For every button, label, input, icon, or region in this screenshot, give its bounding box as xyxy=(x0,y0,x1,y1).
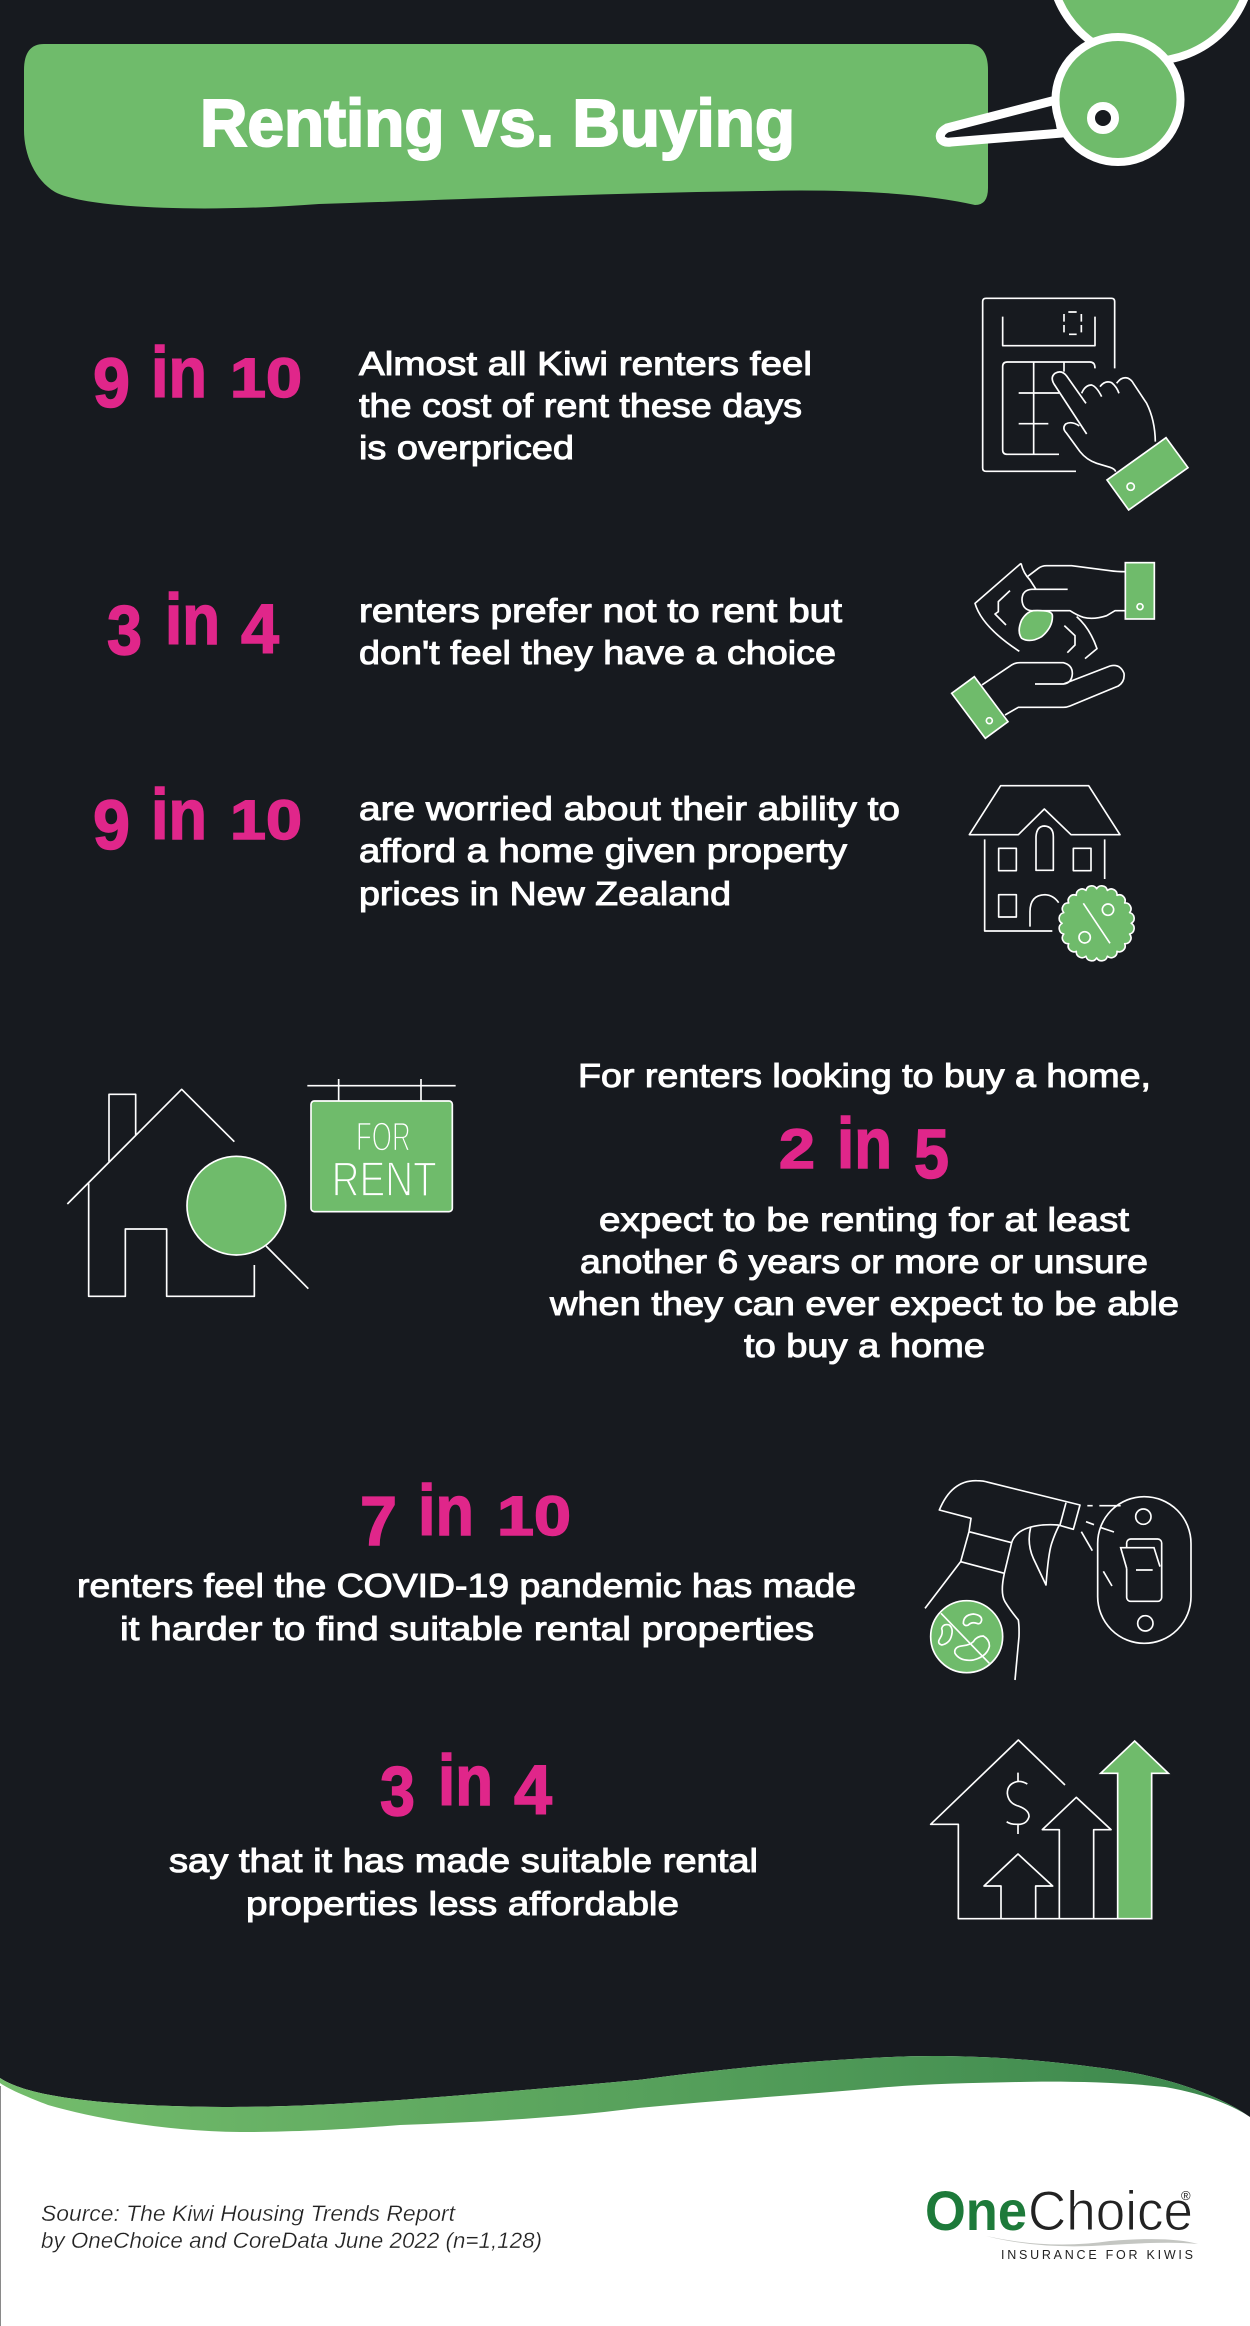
text: worried about affording a home: prices in New Zealand xyxy=(359,875,731,912)
stat: 7 in 10 xyxy=(77,1472,856,1647)
text: renters feel rent overpriced: is overpriced xyxy=(359,429,574,466)
text: covid rental search xyxy=(77,1567,856,1647)
icon: key xyxy=(940,0,1250,162)
number: 7 in 10 xyxy=(360,1472,571,1560)
number: 7 in 10: in xyxy=(418,1472,474,1551)
number: 3 in 4: 4 xyxy=(241,590,279,668)
icon: house under magnifier xyxy=(67,1089,308,1296)
text: expect to keep renting: when they can ever expect to be able xyxy=(549,1285,1179,1322)
text: less affordable xyxy=(169,1842,758,1922)
text: renters feel rent overpriced xyxy=(359,345,812,466)
stat: 9 in 10 worried xyxy=(93,776,900,912)
icon: hand on calculator xyxy=(983,298,1188,510)
OneChoice logo: One xyxy=(925,2179,1027,2242)
number: 9 in 10 xyxy=(93,776,302,864)
text: worried about affording a home xyxy=(359,790,900,912)
stat: 2 in 5 xyxy=(549,1057,1179,1364)
source note xyxy=(41,2201,542,2253)
number: 3 in 4: 4 xyxy=(514,1751,552,1829)
OneChoice logo xyxy=(925,2179,1198,2262)
number: 2 in 5: 5 xyxy=(914,1115,949,1193)
number: 3 in 4: 3 xyxy=(380,1752,415,1830)
source note: by OneChoice and CoreData June 2022 (n=1,128) xyxy=(41,2228,542,2253)
icon: spray bottle and light switch xyxy=(925,1481,1191,1680)
text: worried about affording a home: are worried about their ability to xyxy=(359,790,900,827)
icon: house with percent badge xyxy=(969,786,1134,961)
number: 3 in 4: in xyxy=(165,581,220,660)
icon: for rent sign: FOR xyxy=(356,1114,411,1160)
text: prefer not to rent xyxy=(359,592,842,671)
stat: 3 in 4 no choice xyxy=(107,581,842,671)
number: 7 in 10: 10 xyxy=(497,1484,571,1547)
icon: for rent sign xyxy=(307,1079,456,1212)
number: 2 in 5 xyxy=(779,1105,949,1193)
number: 9 in 10: in xyxy=(151,334,207,413)
number: 9 in 10: 9 xyxy=(93,344,130,422)
number: 2 in 5: in xyxy=(837,1105,892,1184)
footer white area xyxy=(0,2056,1250,2326)
text: expect to keep renting: to buy a home xyxy=(744,1327,985,1364)
OneChoice logo: INSURANCE FOR KIWIS xyxy=(1001,2248,1193,2262)
number: 3 in 4 xyxy=(380,1742,552,1830)
text: expect to keep renting: another 6 years or more or unsure xyxy=(580,1243,1148,1280)
icon: hands exchanging money xyxy=(952,563,1154,738)
text: worried about affording a home: afford a home given property xyxy=(359,832,848,869)
text: covid rental search: renters feel the COVID-19 pandemic has made xyxy=(77,1567,856,1604)
icon: for rent sign: RENT xyxy=(332,1153,437,1207)
number: 9 in 10: 9 xyxy=(93,786,130,864)
footer left edge line xyxy=(0,2086,1,2326)
OneChoice logo: Choice xyxy=(1028,2179,1193,2242)
source note: Source: The Kiwi Housing Trends Report xyxy=(41,2201,456,2226)
OneChoice logo: ® xyxy=(1181,2188,1191,2203)
text: expect to keep renting xyxy=(549,1201,1179,1364)
number: 2 in 5: 2 xyxy=(779,1117,815,1180)
text: prefer not to rent: don't feel they have a choice xyxy=(359,634,836,671)
number: 9 in 10: in xyxy=(151,776,207,855)
stat: 3 in 4 less affordable xyxy=(169,1742,758,1922)
number: 3 in 4: 3 xyxy=(107,591,142,669)
title: Renting vs. Buying xyxy=(200,86,795,161)
text: renters feel rent overpriced: Almost all Kiwi renters feel xyxy=(359,345,812,382)
lead-in text: For renters looking to buy a home, xyxy=(578,1057,1151,1094)
number: 3 in 4: in xyxy=(438,1742,493,1821)
footer green wave xyxy=(0,2056,1250,2132)
text: prefer not to rent: renters prefer not to rent but xyxy=(359,592,842,629)
text: renters feel rent overpriced: the cost of rent these days xyxy=(359,387,802,424)
number: 3 in 4 xyxy=(107,581,279,669)
number: 9 in 10: 10 xyxy=(230,788,302,851)
text: covid rental search: it harder to find suitable rental properties xyxy=(120,1610,814,1647)
icon: rising price arrows with house xyxy=(931,1740,1168,1919)
number: 7 in 10: 7 xyxy=(360,1482,397,1560)
text: expect to keep renting: expect to be renting for at least xyxy=(599,1201,1129,1238)
number: 9 in 10: 10 xyxy=(230,346,302,409)
text: less affordable: say that it has made suitable rental xyxy=(169,1842,758,1879)
stat: 9 in 10 overpriced xyxy=(93,334,812,466)
title banner xyxy=(24,44,988,208)
number: 9 in 10 xyxy=(93,334,302,422)
text: less affordable: properties less affordable xyxy=(246,1885,679,1922)
